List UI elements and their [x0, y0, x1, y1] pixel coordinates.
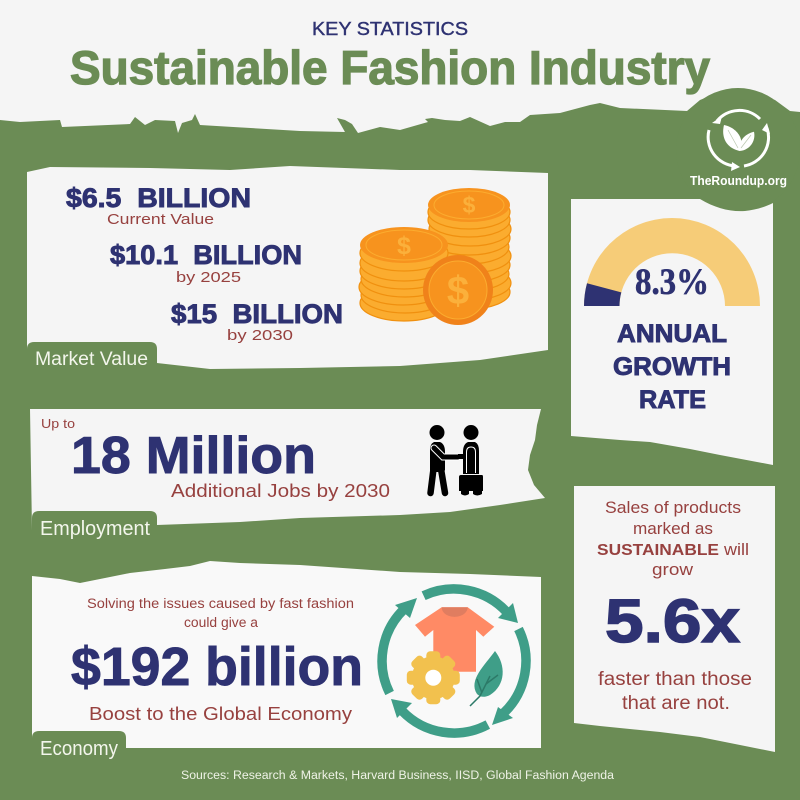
employment figures — [41, 416, 390, 501]
lead-in text — [597, 498, 749, 579]
closing text — [598, 669, 752, 714]
panel: economy — [32, 561, 541, 762]
t-shirt — [415, 607, 494, 672]
tab: employment: Employment — [40, 518, 150, 540]
gauge value: 8.3% — [635, 262, 709, 303]
panel: sustainable sales growth — [574, 486, 775, 752]
tab: employment — [32, 511, 157, 545]
economy figures — [71, 596, 363, 724]
gauge caption: ANNUAL — [617, 320, 727, 348]
gauge caption — [613, 320, 731, 414]
employment figures: Up to — [41, 416, 75, 431]
big number: 5.6x — [605, 587, 740, 655]
gauge caption: RATE — [639, 386, 706, 414]
icon: stacks of gold coins: $ — [397, 232, 411, 260]
lead-in text: marked as — [633, 519, 713, 538]
employment figures: 18 Million — [71, 427, 316, 485]
tab: economy: Economy — [40, 738, 118, 760]
closing text: faster than those — [598, 669, 752, 690]
title: Sustainable Fashion Industry — [70, 41, 710, 94]
gear — [407, 651, 460, 704]
leaf — [470, 651, 503, 706]
market value figures: by 2030 — [227, 327, 293, 344]
tab: market value — [27, 342, 157, 372]
icon: two business people shaking hands — [430, 425, 483, 496]
market value figures — [66, 183, 343, 344]
closing text: that are not. — [622, 693, 730, 714]
torn paper header background — [0, 0, 800, 133]
icon: recycling ring with leaves — [708, 110, 770, 171]
economy figures: Boost to the Global Economy — [89, 704, 352, 724]
lead-in text: grow — [652, 560, 694, 579]
panel: employment — [30, 409, 545, 545]
employment figures: Additional Jobs by 2030 — [171, 481, 390, 501]
icon: stacks of gold coins — [359, 188, 511, 325]
gauge chart — [584, 218, 760, 306]
recycling arrows — [382, 589, 526, 733]
economy figures: could give a — [184, 615, 258, 630]
economy figures: Solving the issues caused by fast fashion — [87, 596, 354, 611]
lead-in text: will — [723, 540, 749, 559]
kicker: key statistics: KEY STATISTICS — [312, 19, 468, 39]
left figure — [430, 442, 445, 472]
lead-in text: Sales of products — [605, 498, 741, 517]
right figure — [458, 442, 479, 474]
icon: stacks of gold coins: $ — [463, 192, 476, 218]
logo wordmark: TheRoundup.org — [690, 173, 787, 188]
market value figures: $10.1 BILLION — [110, 240, 302, 270]
market value figures: Current Value — [107, 211, 214, 228]
panel: annual growth rate — [571, 199, 773, 465]
heading block — [70, 19, 710, 94]
market value figures: by 2025 — [176, 269, 241, 286]
lead-in text: SUSTAINABLE — [597, 542, 719, 559]
market value figures: $15 BILLION — [171, 299, 343, 329]
gauge caption: GROWTH — [613, 353, 731, 381]
logo badge — [676, 88, 800, 212]
market value figures: $6.5 BILLION — [66, 183, 251, 213]
tab: economy — [32, 731, 126, 762]
panel: market value — [27, 166, 548, 372]
icon: circular fashion — [382, 589, 526, 733]
icon: stacks of gold coins: $ — [447, 269, 469, 313]
sources footer: Sources: Research & Markets, Harvard Business, IISD, Global Fashion Agenda — [181, 770, 615, 782]
economy figures: $192 billion — [71, 637, 363, 697]
tab: market value: Market Value — [35, 349, 148, 370]
